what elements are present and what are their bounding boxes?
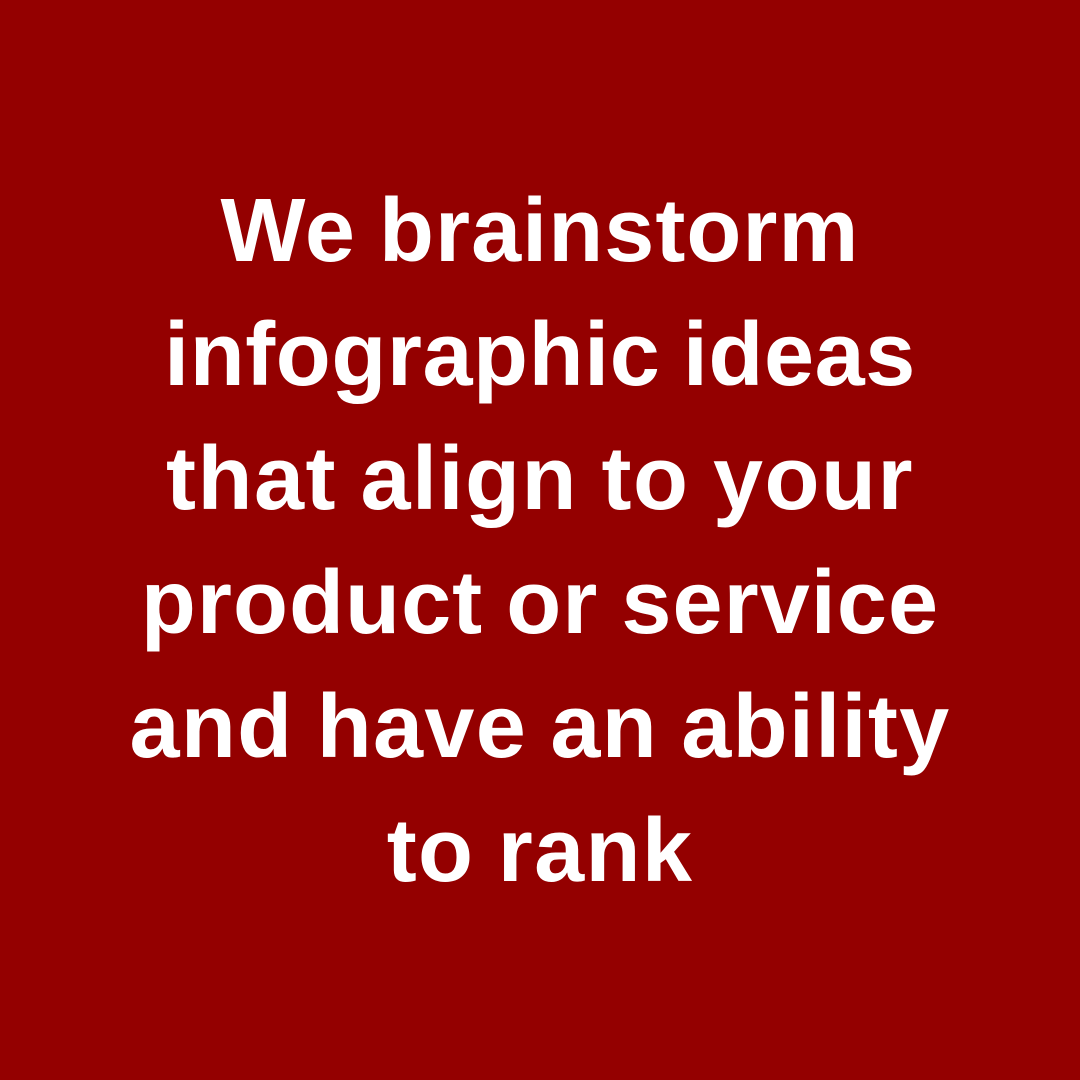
main statement text xyxy=(130,181,950,901)
main statement text: that align to your xyxy=(166,429,914,529)
main statement text: infographic ideas xyxy=(164,305,916,405)
main statement text: to rank xyxy=(387,801,693,901)
main statement text: and have an ability xyxy=(130,677,950,777)
main statement text: product or service xyxy=(141,553,939,653)
main statement text: We brainstorm xyxy=(220,181,859,281)
